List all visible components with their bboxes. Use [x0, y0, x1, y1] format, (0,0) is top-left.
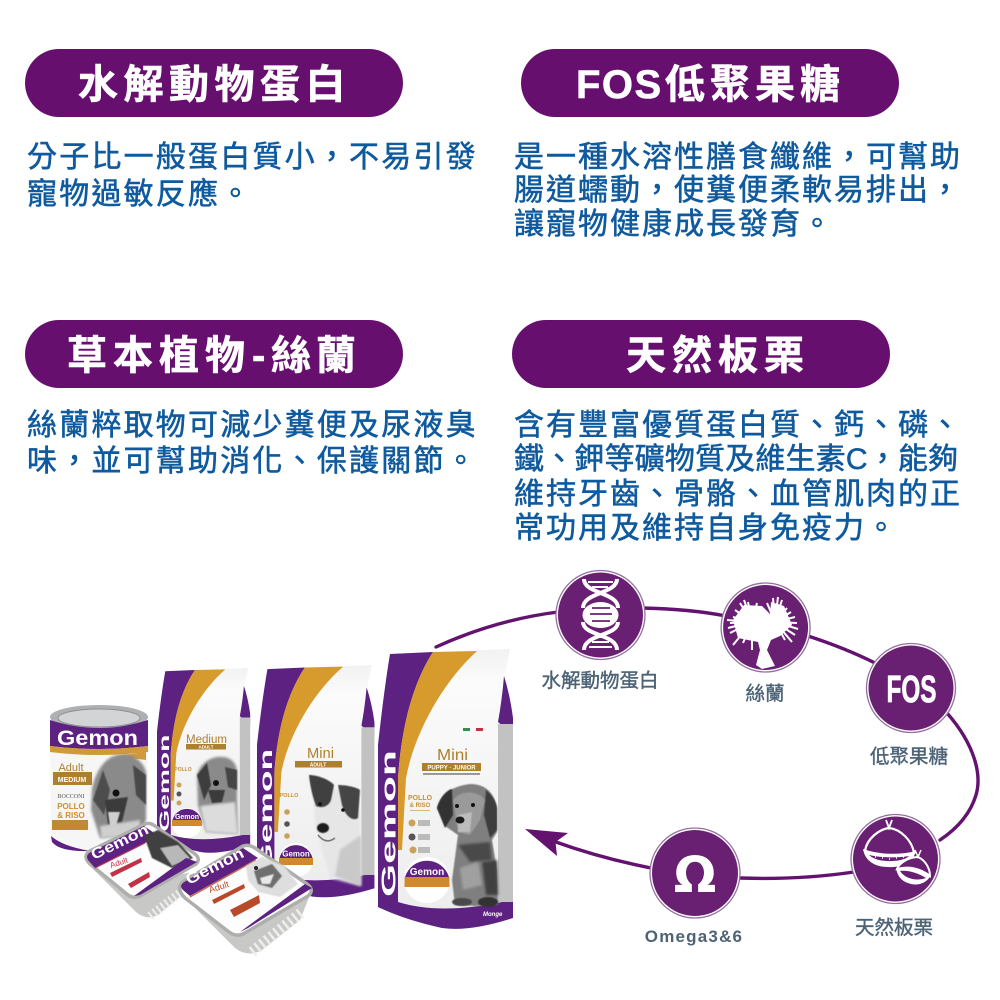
- product: Medium bag: [157, 668, 250, 853]
- text block: hydrolyzed protein description: [27, 141, 478, 211]
- product: tray one: Adult: [109, 855, 130, 870]
- product: Mini Puppy bag: POLLO: [408, 795, 433, 802]
- heading pill: FOS: [521, 49, 899, 117]
- arrow: ingredient cycle: [436, 608, 978, 878]
- heading pill: hydrolyzed protein: 水解動物蛋白: [78, 63, 351, 107]
- panel: FOS: [514, 49, 962, 241]
- text block: FOS description: 讓寵物健康成長發育。: [514, 208, 834, 241]
- text block: FOS description: 是一種水溶性膳食纖維，可幫助: [514, 141, 962, 174]
- product: Mini Puppy bag: & RISO: [410, 803, 431, 809]
- text block: FOS description: [514, 141, 962, 241]
- text block: herbal description: [27, 409, 478, 478]
- dog: puppy: [437, 784, 498, 907]
- heading pill: herbal: [25, 320, 403, 388]
- product: tray two: Adult: [208, 879, 231, 895]
- product: tray two: Gemon: [183, 845, 247, 889]
- product: can: & RISO: [57, 811, 85, 820]
- text block: chestnut description: 含有豐富優質蛋白質、鈣、磷、: [514, 409, 962, 442]
- text block: chestnut description: 常功用及維持自身免疫力。: [514, 512, 898, 545]
- dog: terrier: [309, 775, 361, 886]
- text block: herbal description: 味，並可幫助消化、保護關節。: [27, 445, 478, 478]
- text block: herbal description: 絲蘭粹取物可減少糞便及尿液臭: [27, 409, 478, 442]
- icon: thistle: [721, 583, 810, 672]
- text block: FOS description: 腸道蠕動，使糞便柔軟易排出，: [514, 174, 962, 207]
- product: can: MEDIUM: [58, 777, 86, 784]
- product: tray two: [180, 845, 312, 954]
- panel: chestnut: [512, 320, 962, 545]
- label: silymarin: 絲蘭: [745, 683, 785, 705]
- icon: FOS: [866, 644, 956, 732]
- product: can: Adult: [58, 762, 84, 774]
- label: hydrolyzed protein: 水解動物蛋白: [541, 670, 659, 692]
- badge: Gemon: [175, 814, 199, 821]
- badge: [172, 808, 202, 838]
- panel: hydrolyzed protein: [25, 49, 478, 211]
- product: Mini Puppy bag: Mini: [437, 747, 468, 764]
- product: can: BOCCONI: [57, 794, 85, 800]
- heading pill: herbal: 草本植物-絲蘭: [67, 334, 356, 378]
- product: Mini Adult bag: ADULT: [310, 762, 326, 768]
- product: tray one: [86, 821, 198, 917]
- heading pill: FOS: FOS: [576, 63, 663, 107]
- text block: chestnut description: 維持牙齒、骨骼、血管肌肉的正: [514, 478, 962, 511]
- icon: DNA: [556, 570, 645, 660]
- product: can: Gemon: [57, 727, 138, 750]
- heading pill: hydrolyzed protein: [25, 49, 403, 117]
- product: Mini Adult bag: POLLO: [280, 793, 299, 799]
- heading pill: FOS: 低聚果糖: [665, 63, 845, 107]
- heading pill: chestnut: 天然板栗: [626, 334, 810, 378]
- badge: Gemon: [282, 850, 310, 858]
- text block: chestnut description: 鐵、鉀等礦物質及維生素C，能夠: [514, 443, 960, 476]
- text block: hydrolyzed protein description: 分子比一般蛋白質小，不易引發: [27, 141, 478, 174]
- product: Mini Adult bag: Mini: [307, 745, 334, 762]
- heading pill: chestnut: [512, 320, 890, 388]
- product: Medium bag: Medium: [186, 734, 227, 746]
- product: can: [50, 705, 148, 851]
- product: Mini Puppy bag: PUPPY · JUNIOR: [427, 766, 476, 772]
- text block: hydrolyzed protein description: 寵物過敏反應。: [27, 178, 252, 211]
- badge: [404, 857, 450, 903]
- badge: [279, 843, 313, 877]
- icon: Omega: Ω: [674, 846, 716, 904]
- icon: FOS: FOS: [886, 669, 936, 711]
- badge: Gemon: [410, 867, 444, 878]
- label: oligosaccharide: 低聚果糖: [870, 746, 948, 768]
- text block: chestnut description: [514, 409, 962, 545]
- panel: herbal silymarin: [25, 320, 478, 478]
- product: Medium bag: ADULT: [199, 744, 214, 750]
- product: can: POLLO: [57, 802, 85, 811]
- product: Mini Puppy bag: Gemon: [378, 750, 400, 897]
- product: Mini Puppy bag: [378, 649, 513, 929]
- dog: shepherd: [197, 757, 238, 834]
- product: Medium bag: Gemon: [157, 735, 172, 832]
- label: chestnut: 天然板栗: [855, 917, 933, 939]
- product: Mini Adult bag: Gemon: [257, 749, 276, 871]
- dog: can: [91, 754, 146, 838]
- brand mark: Monge: [483, 912, 503, 918]
- product: Medium bag: POLLO: [174, 767, 192, 773]
- product: tray one: Gemon: [88, 821, 151, 864]
- icon: Omega: [650, 828, 740, 918]
- product: Mini Adult bag: [257, 665, 374, 897]
- label: omega: Omega3&6: [645, 927, 743, 946]
- icon: chestnut: [851, 814, 940, 904]
